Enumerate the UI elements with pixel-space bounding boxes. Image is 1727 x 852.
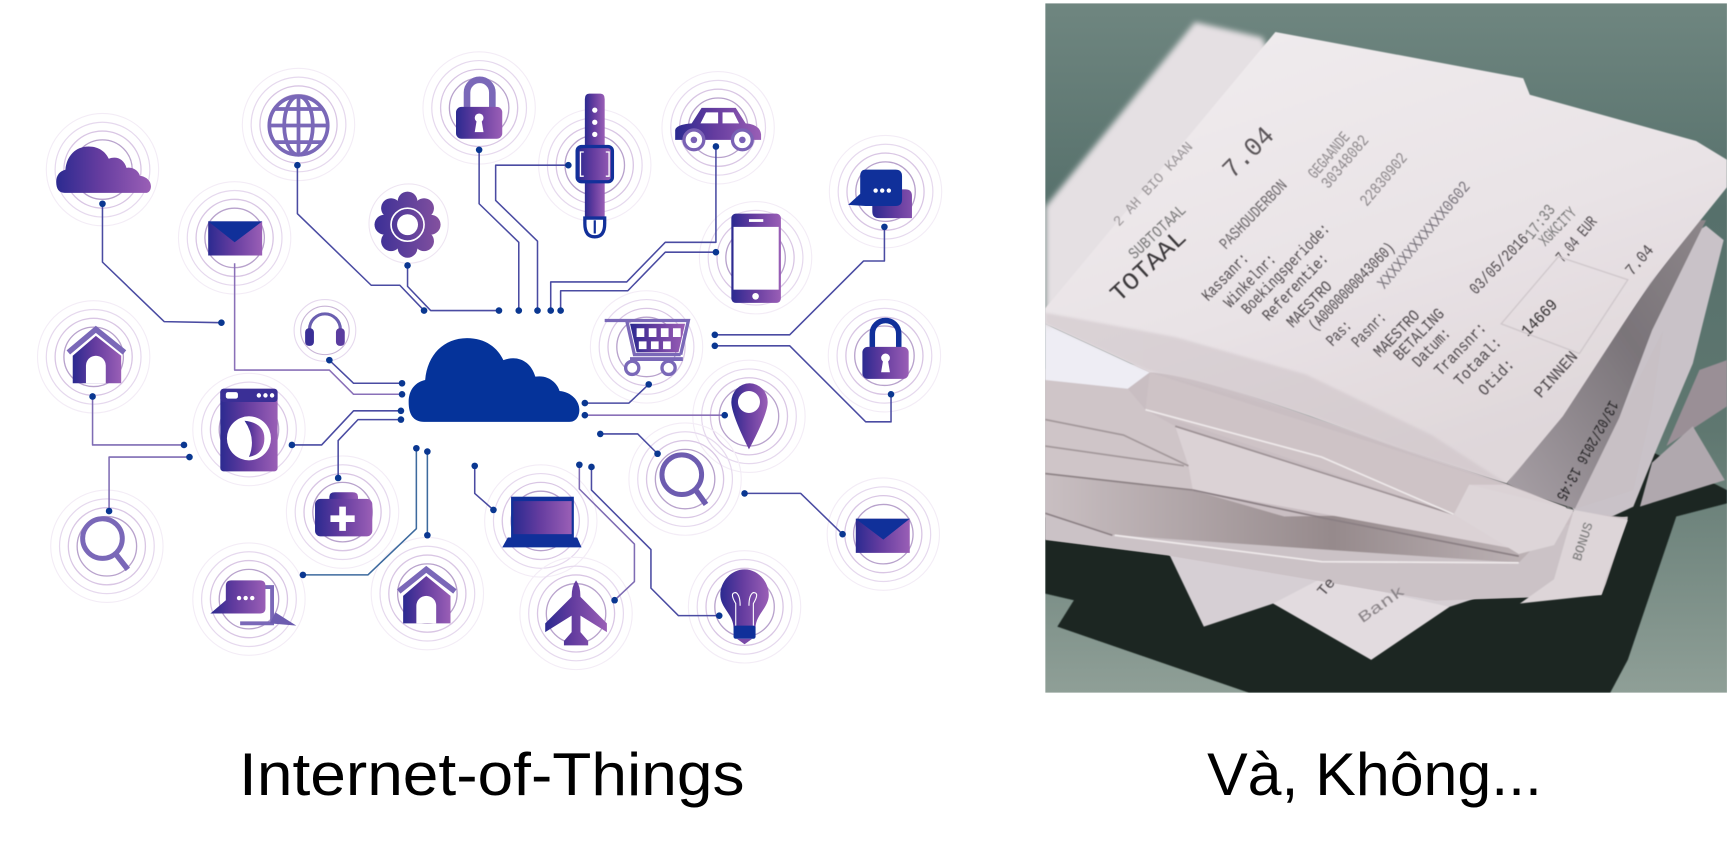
receipt side text (1314, 397, 1622, 627)
receipt card box outline (1501, 257, 1628, 354)
icon: car (675, 108, 761, 150)
paper: right fan (1507, 220, 1727, 529)
receipt side text: Te (1314, 574, 1340, 600)
layer left stack (1046, 380, 1148, 484)
icon: central cloud (409, 338, 579, 422)
receipt printed text: TOTAAL (1106, 225, 1193, 309)
receipt printed text: Referentie: (1259, 249, 1333, 325)
receipt printed text: 7.04 (1217, 121, 1281, 185)
receipt printed text: 2 AH BIO KAAN (1111, 140, 1197, 230)
signal rings behind icons (37, 52, 942, 670)
layer dark middle band (1046, 474, 1529, 562)
receipt printed text: MAESTRO (1370, 306, 1424, 361)
receipt printed text: GEGAANDE (1304, 128, 1354, 183)
icon: gear (375, 192, 441, 258)
panel: internet of things diagram (37, 52, 942, 670)
photo shadow under the pile (1045, 441, 1727, 693)
trace end dots (89, 143, 894, 619)
panel: photo of a pile of paper receipts (1045, 3, 1727, 693)
circuit traces connecting icons to the central cloud (93, 146, 891, 616)
icon: medical case (315, 492, 372, 536)
bonus tab (1520, 510, 1628, 604)
paper: fold shadow on the top receipt (1045, 313, 1507, 483)
receipt printed text: Transnr: (1431, 319, 1491, 380)
layer bottom band (1045, 513, 1628, 600)
icon: headset (305, 314, 345, 346)
receipt printed text: 14669 (1518, 296, 1562, 340)
icon: airplane (545, 580, 607, 645)
receipt printed text: 7.04 EUR (1552, 213, 1601, 266)
receipt printed text: 17:33 (1521, 201, 1560, 243)
icon: magnifier centre right (662, 455, 706, 504)
icon: chat bubbles bottom (210, 580, 296, 626)
receipt printed text: Pas: (1323, 317, 1356, 350)
photo background table (1045, 3, 1727, 693)
icon: magnifier left (83, 519, 128, 569)
receipt printed text: Pasnr: (1348, 308, 1391, 351)
layer 4 right block (1509, 507, 1574, 554)
paper: back receipt (1045, 22, 1275, 330)
receipt side text: BONUS (1570, 521, 1597, 563)
paper: base of the main stack (1045, 363, 1628, 600)
icon: smartphone (731, 214, 781, 303)
icon: padlock right (862, 320, 909, 379)
receipt printed text: PASHOUDERBON (1216, 176, 1291, 253)
receipt side text: Bank (1355, 582, 1409, 627)
icon: chat bubbles top right (848, 170, 925, 218)
icon: washing machine (220, 389, 278, 471)
receipt printed text: MAESTRO (1283, 277, 1336, 332)
receipt side text: 13/02/2016 13:45 (1552, 397, 1622, 503)
icon: shopping cart (605, 320, 688, 374)
icon: globe (269, 96, 328, 155)
receipt printed text: Kassanr: (1198, 249, 1253, 305)
paper: main stack layers (1045, 324, 1628, 604)
icon: small cloud (56, 146, 151, 193)
caption: Internet-of-Things: Internet-of-Things (239, 740, 745, 808)
icon: padlock top (456, 80, 502, 139)
receipt printed text: Boekingsperiode: (1238, 220, 1334, 318)
receipt printed text: 22830902 (1356, 149, 1412, 210)
icon: map pin (731, 383, 768, 449)
receipt printed text: XXXXXXXXXXXX0602 (1374, 178, 1475, 293)
caption: Và, Không...: Và, Không... (1207, 740, 1542, 808)
icon: smartwatch (577, 94, 612, 237)
icon: house bottom (399, 569, 455, 623)
icon: envelope left (208, 221, 262, 256)
icon: envelope right (856, 519, 910, 553)
paper: top receipt (1045, 32, 1727, 483)
paper: layer edges (1045, 410, 1519, 563)
icon: house left (68, 329, 124, 383)
paper: bottom fan of receipts (1169, 555, 1475, 660)
blue white wedge (1045, 324, 1150, 389)
receipt printed text: 7.04 (1622, 241, 1658, 280)
layer 3 (1175, 426, 1574, 550)
receipt printed text: Otid: (1475, 355, 1519, 400)
receipt printed text: Winkelnr: (1220, 250, 1281, 312)
receipt printed text: XGKCITY (1535, 204, 1581, 250)
icon: laptop (502, 497, 582, 547)
layer 2 (1145, 372, 1506, 514)
icon: light bulb (720, 569, 769, 644)
receipt printed text: BETALING (1390, 305, 1449, 365)
receipt printed text (1106, 121, 1658, 402)
receipt printed text: 30348082 (1318, 131, 1373, 193)
receipt printed text: Totaal: (1450, 333, 1506, 390)
receipt printed text: 03/05/2016 (1466, 230, 1533, 299)
receipt printed text: Datum: (1409, 324, 1455, 371)
receipt printed text: PINNEN (1530, 348, 1582, 402)
receipt printed text: (A0000000043060) (1305, 239, 1399, 335)
receipt printed text: SUBTOTAAL (1125, 201, 1190, 264)
